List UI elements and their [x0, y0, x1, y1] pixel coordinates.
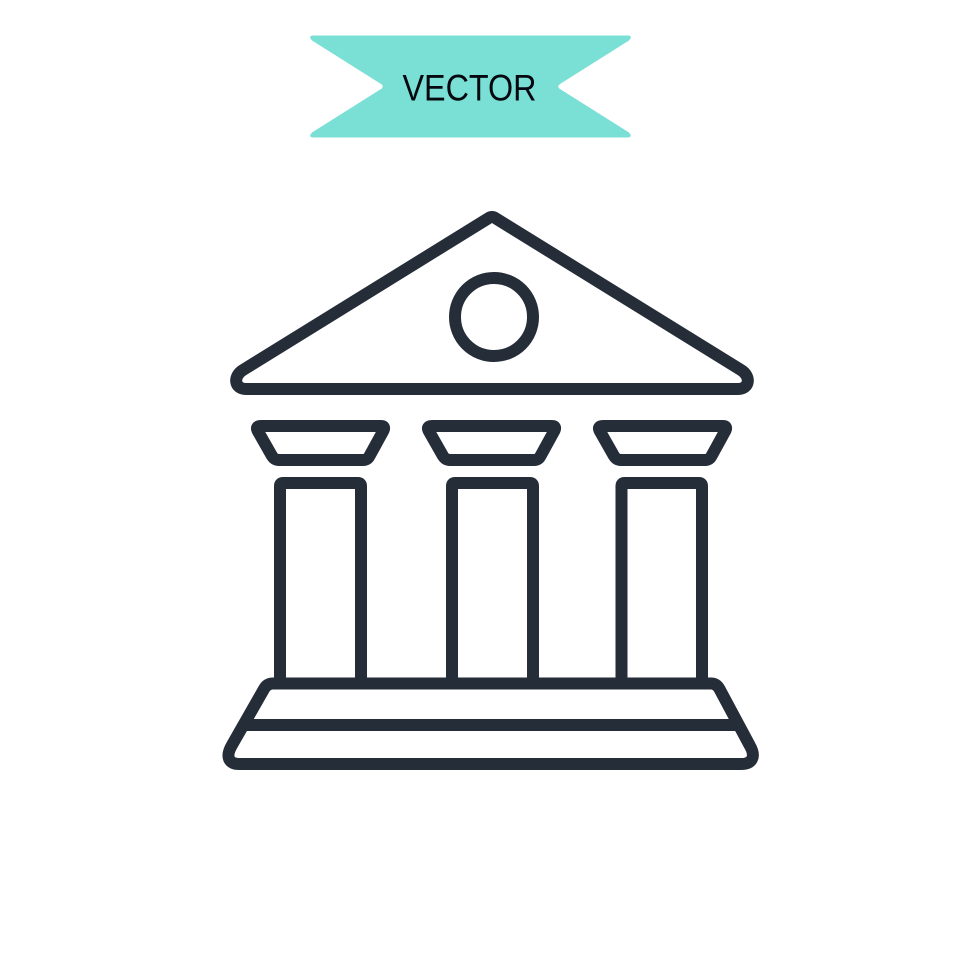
right column: [622, 483, 702, 684]
banner: vector ribbon: [310, 36, 631, 138]
roof circle: [455, 278, 533, 356]
icon: bank building: [228, 217, 753, 764]
middle capital: [428, 426, 555, 460]
middle column: [452, 483, 533, 684]
base steps: [228, 684, 753, 764]
step divider: [244, 719, 738, 731]
left capital: [257, 426, 384, 460]
banner label: VECTOR: [402, 68, 536, 108]
left column: [280, 483, 361, 684]
roof pediment: [236, 217, 748, 389]
right capital: [599, 426, 726, 460]
